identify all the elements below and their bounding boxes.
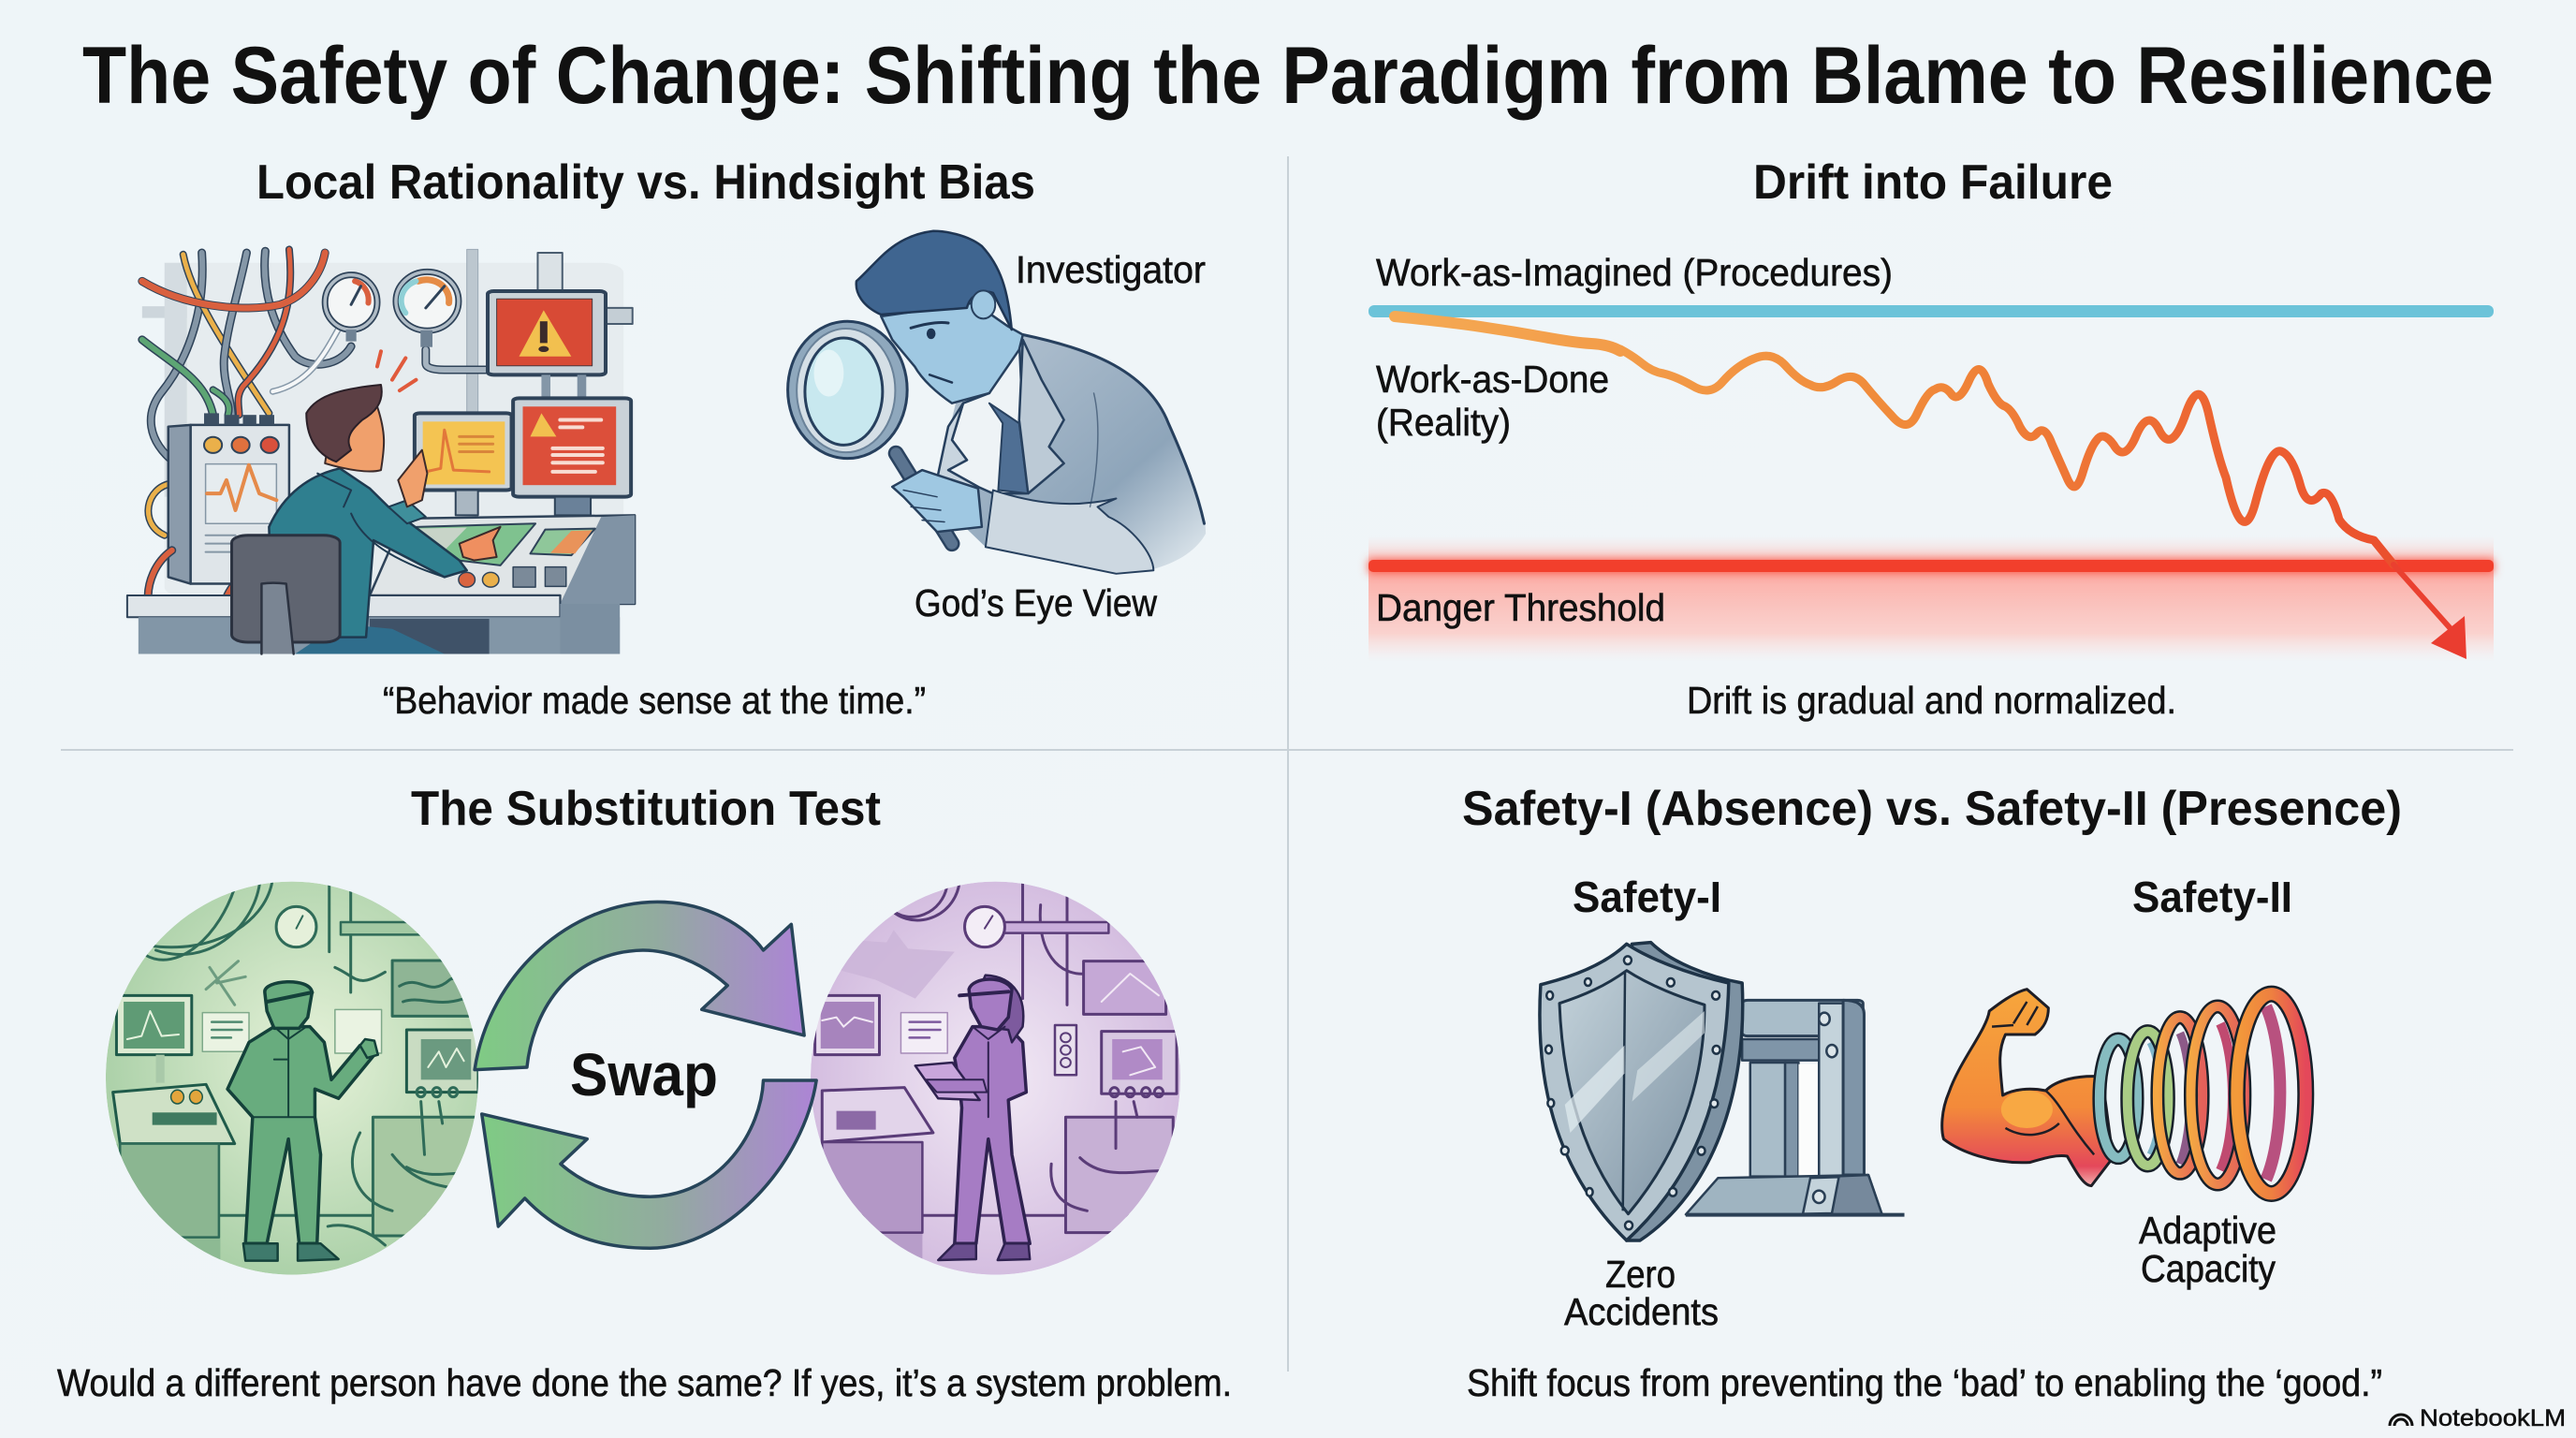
gauges [325,275,377,330]
panel: drift into failure [1368,155,2494,722]
heading: drift: Drift into Failure [1753,155,2113,210]
label: danger threshold: Danger Threshold [1376,586,1665,629]
label: adaptive capacity [2139,1209,2276,1290]
caption: substitution question: Would a different person have done the same? If yes, it’s a system problem. [57,1361,1232,1404]
illustration: investigator with magnifying glass [788,231,1206,574]
purple worker [955,1027,1030,1243]
illustration: shield and gate [1540,943,1905,1240]
red monitor with warning [488,291,606,374]
red monitor with text [513,398,631,497]
illustration: operator in control room [127,249,635,654]
suit [933,334,1206,574]
spring rings [2100,1039,2137,1158]
hand [892,470,982,532]
danger zone [1368,536,2494,662]
label: zero accidents [1564,1253,1719,1333]
shield [1627,943,1743,1240]
label: work-as-done: Work-as-Done [1376,358,1609,401]
line: work-as-imagined [1368,305,2494,317]
label: adaptive capacity: Capacity [2141,1247,2276,1290]
arrow head [2431,616,2466,659]
head [881,303,1023,404]
chart: work-as-done drift line [1395,316,2454,633]
caption: behavior made sense: “Behavior made sense at the time.” [383,679,926,722]
caption: shift focus: Shift focus from preventing the ‘bad’ to enabling the ‘good.” [1467,1361,2382,1404]
green worker [227,1027,374,1243]
magnifying glass [896,453,952,544]
subheading: safety-I: Safety-I [1573,873,1721,921]
icon: swap arrows [475,902,816,1248]
panel: local rationality vs hindsight bias [127,155,1206,722]
label: god's eye view: God’s Eye View [915,581,1157,624]
caption: drift: Drift is gradual and normalized. [1687,679,2176,722]
label: adaptive capacity: Adaptive [2139,1209,2276,1252]
heading: local rationality: Local Rationality vs. Hindsight Bias [256,155,1035,210]
electrical cabinet [168,425,191,584]
yellow monitor [415,413,512,491]
alarm marks [377,351,416,390]
chair [232,536,340,642]
heading: substitution: The Substitution Test [411,782,881,836]
label: investigator: Investigator [1016,248,1206,291]
illustration: green worker in circle [106,882,480,1275]
label: swap: Swap [570,1041,718,1108]
label: work-as-imagined: Work-as-Imagined (Procedures) [1376,251,1893,294]
label: reality: (Reality) [1376,401,1511,444]
label: zero accidents: Zero [1605,1253,1676,1296]
illustration: flexed arm and spring [1942,990,2305,1194]
panel: safety-I vs safety-II [1462,782,2402,1404]
subheading: safety-II: Safety-II [2132,873,2292,921]
console [370,515,635,604]
panel: the substitution test [57,782,1232,1404]
label: zero accidents: Accidents [1564,1290,1719,1333]
arrow: upper [475,902,804,1070]
wires [142,249,497,536]
illustration: purple worker in circle [808,882,1180,1276]
operator [269,468,467,638]
arrow: lower [482,1080,816,1248]
heading: safety comparison: Safety-I (Absence) vs. Safety-II (Presence) [1462,782,2402,836]
watermark: NotebookLM: NotebookLM [2420,1405,2566,1431]
